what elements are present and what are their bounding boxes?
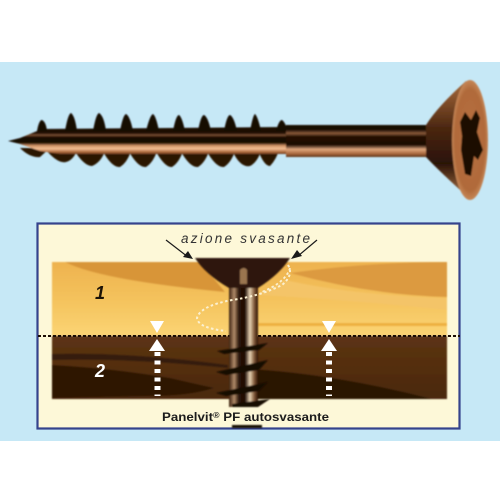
diagram screw shank bbox=[229, 285, 258, 407]
screw thread lobes bbox=[20, 148, 280, 167]
caption: ® bbox=[213, 411, 220, 420]
dotted stem bbox=[326, 352, 332, 396]
background band bbox=[0, 62, 500, 441]
diagram screw head bbox=[195, 258, 290, 288]
dashed swirl path bbox=[197, 265, 290, 331]
wood layer 1 bbox=[52, 262, 447, 336]
icon: left gap marker bbox=[149, 321, 165, 396]
icon: large wood screw bbox=[8, 80, 488, 200]
icon: diagram screw bbox=[195, 258, 290, 428]
screw thread crests bbox=[37, 113, 288, 131]
dotted stem bbox=[154, 352, 160, 396]
arrow: left to screw head bbox=[166, 240, 193, 259]
screw head cross recess bbox=[460, 110, 483, 176]
label: 2: 2 bbox=[94, 361, 105, 381]
screw head face bbox=[452, 80, 488, 200]
diagram screw threads bbox=[216, 343, 270, 407]
caption: PF autosvasante bbox=[220, 410, 329, 424]
panel frame bbox=[38, 224, 460, 428]
up arrow bbox=[321, 339, 337, 351]
screw head cone bbox=[426, 81, 470, 199]
dashed joint line bbox=[38, 335, 460, 337]
arrow: right to screw head bbox=[291, 240, 317, 259]
dashed swirl outline bbox=[262, 268, 290, 292]
label: 1: 1 bbox=[95, 283, 105, 303]
down triangle bbox=[322, 321, 336, 333]
label: azione svasante: azione svasante bbox=[181, 231, 310, 246]
icon: right gap marker bbox=[321, 321, 337, 396]
wood layer 2 bbox=[52, 336, 447, 399]
caption: Panelvit bbox=[162, 410, 208, 424]
panel: countersinking diagram bbox=[38, 224, 460, 428]
up arrow bbox=[149, 339, 165, 351]
screw smooth shank bbox=[286, 125, 426, 157]
down triangle bbox=[150, 321, 164, 333]
screw threaded shaft bbox=[8, 127, 288, 154]
